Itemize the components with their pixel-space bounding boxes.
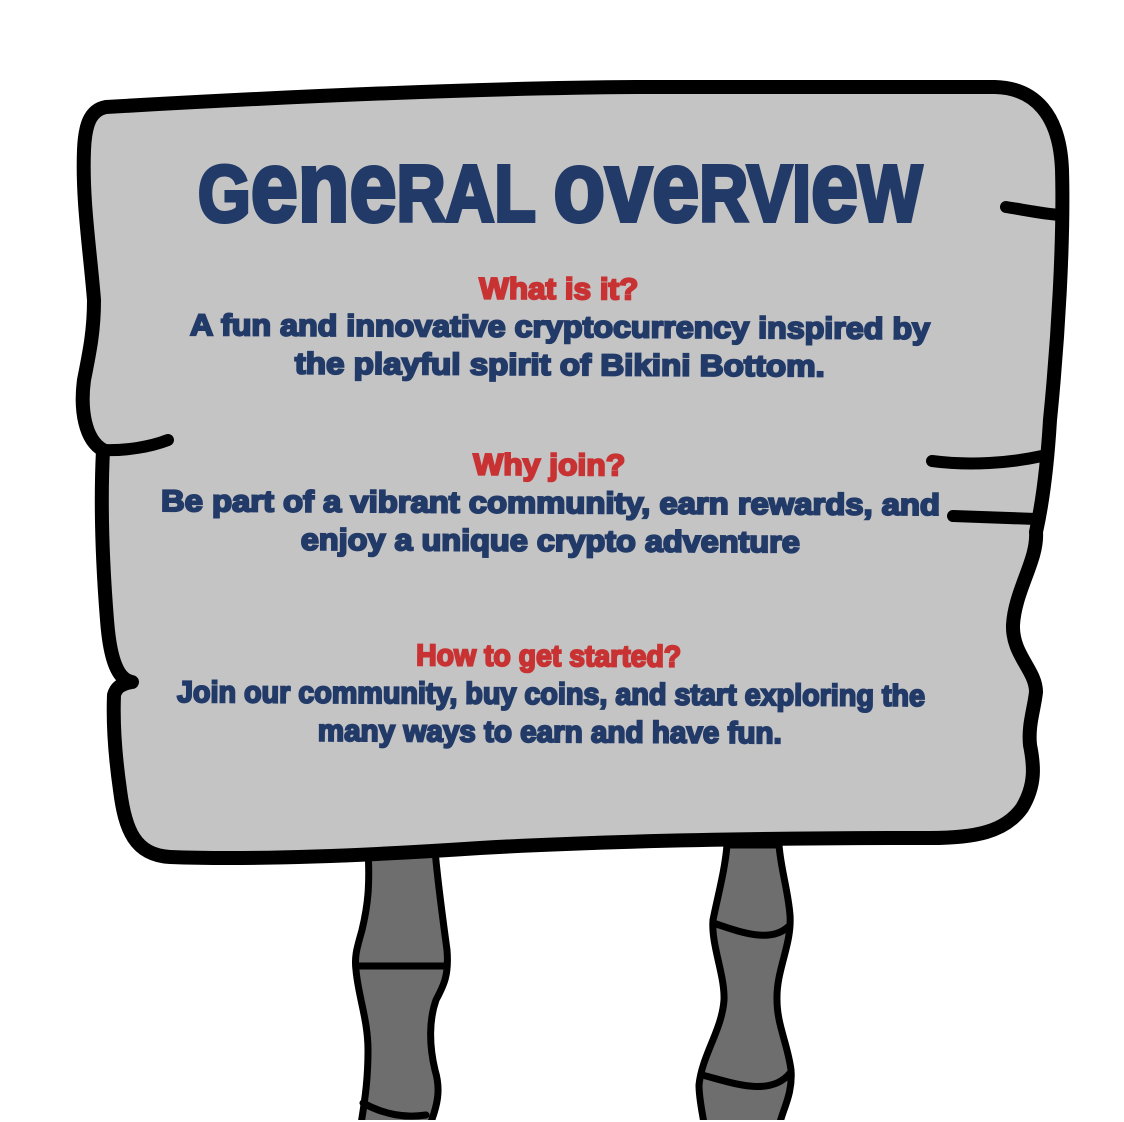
- heading: why join: Why join?: [473, 449, 625, 482]
- section: why join: [161, 447, 940, 560]
- sign board: [83, 86, 1062, 858]
- body line two: how to get started: many ways to earn and have fun.: [318, 715, 782, 750]
- heading: what is it: What is it?: [479, 273, 638, 306]
- body line two: what is it: the playful spirit of Bikini Bottom.: [295, 348, 825, 383]
- body: how to get started: Join our community, buy coins, and start exploring the: [177, 676, 925, 713]
- body: why join: Be part of a vibrant community, earn rewards, and: [161, 485, 940, 522]
- left post: [355, 850, 447, 1122]
- title: GeneRAL oveRVIeW: [198, 131, 922, 243]
- body: what is it: A fun and innovative cryptocurrency inspired by: [190, 309, 930, 346]
- body line two: why join: enjoy a unique crypto adventure: [301, 524, 800, 559]
- section: what is it: [190, 271, 931, 384]
- heading: how to get started: How to get started?: [416, 639, 681, 674]
- plank cracks: [103, 207, 1060, 519]
- section: how to get started: [177, 638, 925, 751]
- right post: [699, 845, 791, 1122]
